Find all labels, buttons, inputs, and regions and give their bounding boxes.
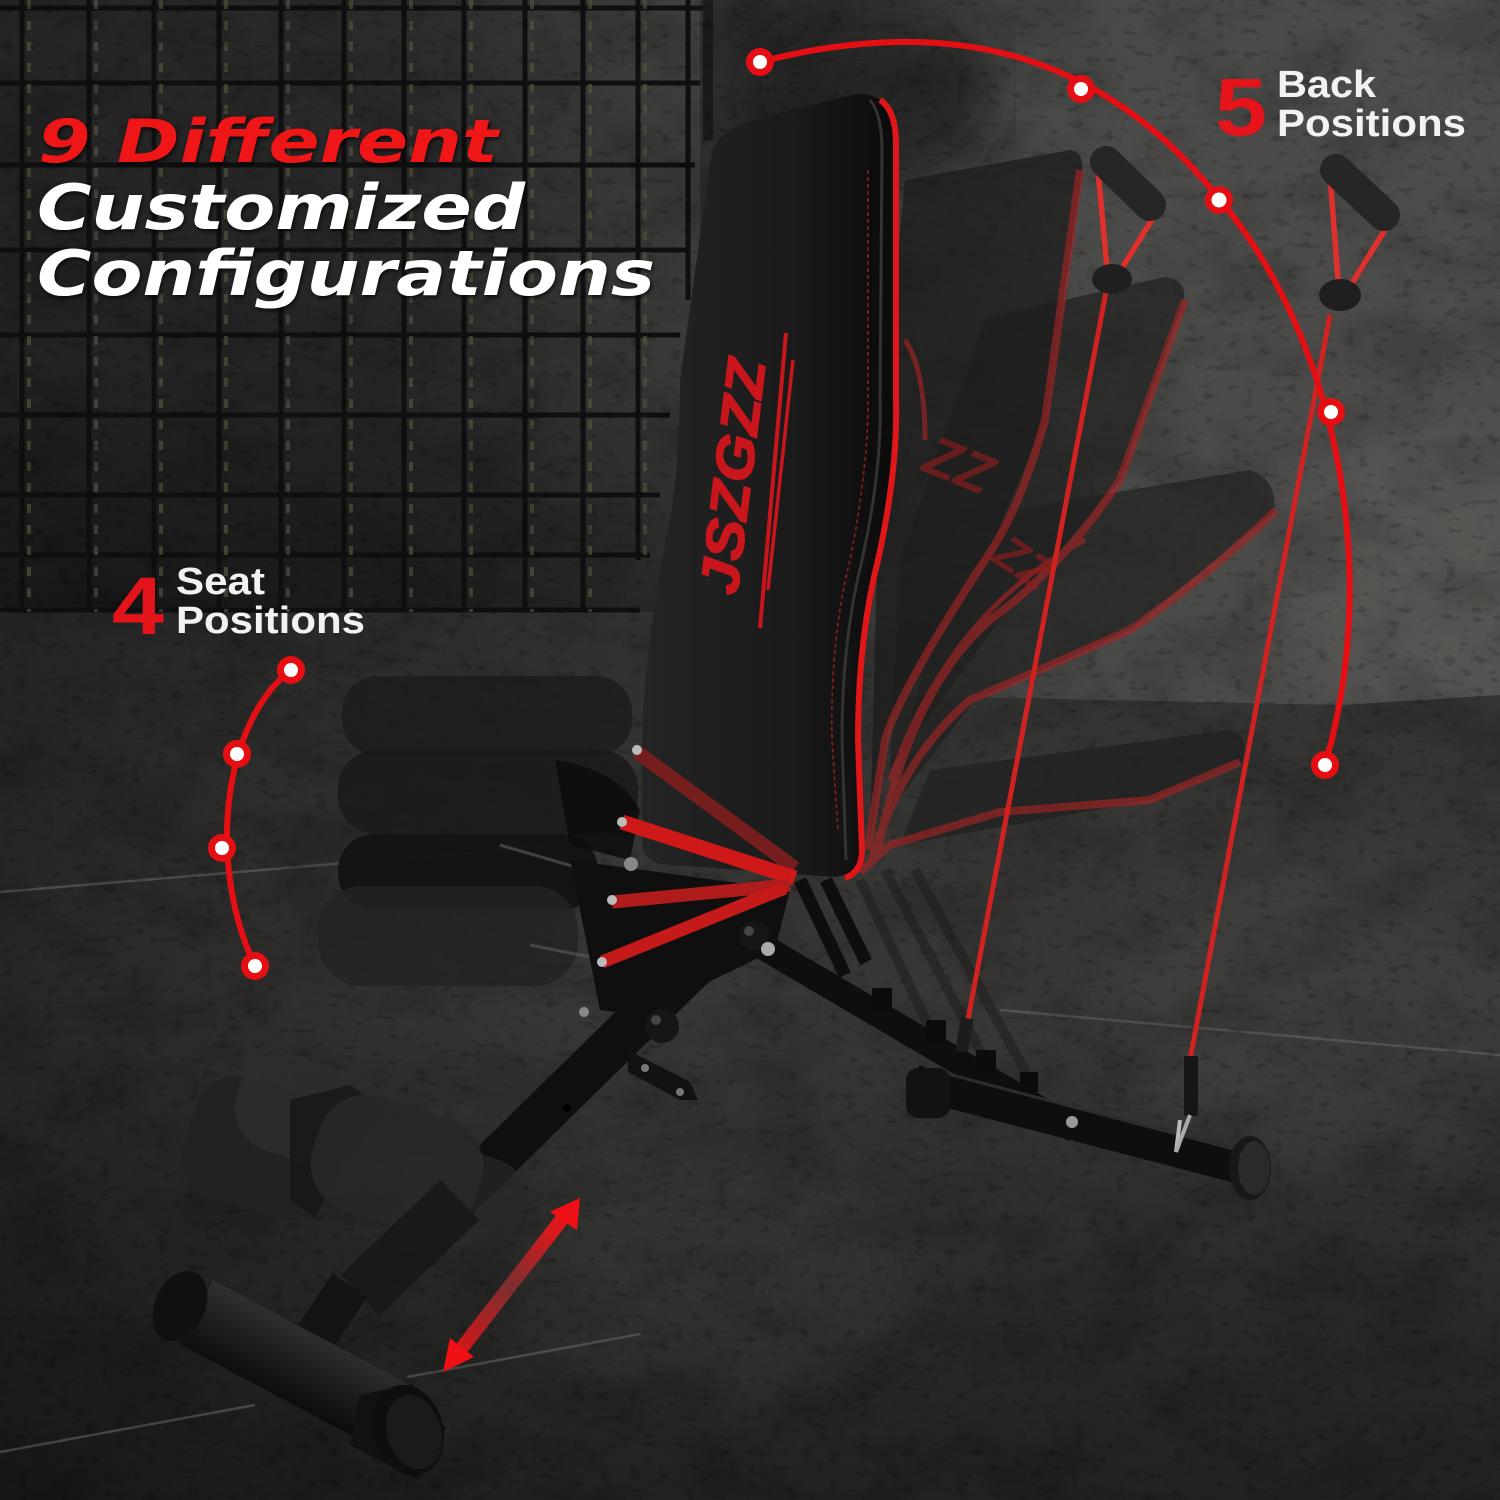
label: 5 back positions: 5 (1215, 62, 1267, 153)
ghost backrest 1 (870, 150, 1082, 840)
label: 4 seat positions: Positions (176, 600, 365, 642)
logo: JSZGZZ (689, 354, 778, 597)
backrest red piping (845, 100, 896, 878)
ghost rear supports (860, 870, 1030, 1080)
label: 5 back positions: Back (1277, 64, 1377, 106)
ghost backrest 2 (890, 277, 1184, 770)
adjustment double arrow (443, 1198, 580, 1372)
leg roller ghost cluster (170, 1041, 536, 1295)
seat positions arc with dots (208, 656, 305, 980)
ghost backrest 3 (890, 470, 1274, 810)
resistance band left (955, 162, 1153, 1053)
red stitching (832, 170, 868, 830)
resistance band right (1176, 170, 1385, 1152)
title: Configurations (37, 237, 655, 310)
backrest main pad (642, 94, 896, 878)
label: 5 back positions (1215, 62, 1466, 153)
frame plates (570, 860, 790, 1015)
label: 5 back positions: Positions (1277, 103, 1466, 145)
title: 9 Different (38, 107, 501, 177)
logo lines (760, 333, 786, 628)
ghost logo: ZZ (914, 422, 1004, 507)
pin knobs (645, 1009, 679, 1043)
ghost red ribs (860, 170, 1276, 872)
label: 4 seat positions: 4 (112, 561, 164, 652)
background: concrete wall (0, 0, 1500, 780)
ghost logo: ZZ (982, 524, 1063, 603)
ghost backrest flat (900, 730, 1244, 845)
bench main frame (450, 860, 790, 1205)
ghost logo (914, 422, 1063, 603)
back positions arc with dots (746, 42, 1350, 779)
title: Customized (37, 171, 526, 244)
title (37, 107, 655, 310)
background: floor (0, 612, 1500, 1500)
front foot (142, 1262, 454, 1484)
background: metal mesh grid (0, 0, 708, 612)
ghost seat positions (318, 676, 640, 986)
ghost back positions of the bench (860, 150, 1276, 1080)
label: 4 seat positions: Seat (176, 561, 265, 603)
bracket (628, 1050, 698, 1100)
label: 4 seat positions (112, 561, 365, 652)
seat rail hinge with red motion arms (579, 745, 795, 1017)
backrest dark side seam (842, 100, 882, 860)
bench rear frame and foot (760, 880, 1271, 1200)
